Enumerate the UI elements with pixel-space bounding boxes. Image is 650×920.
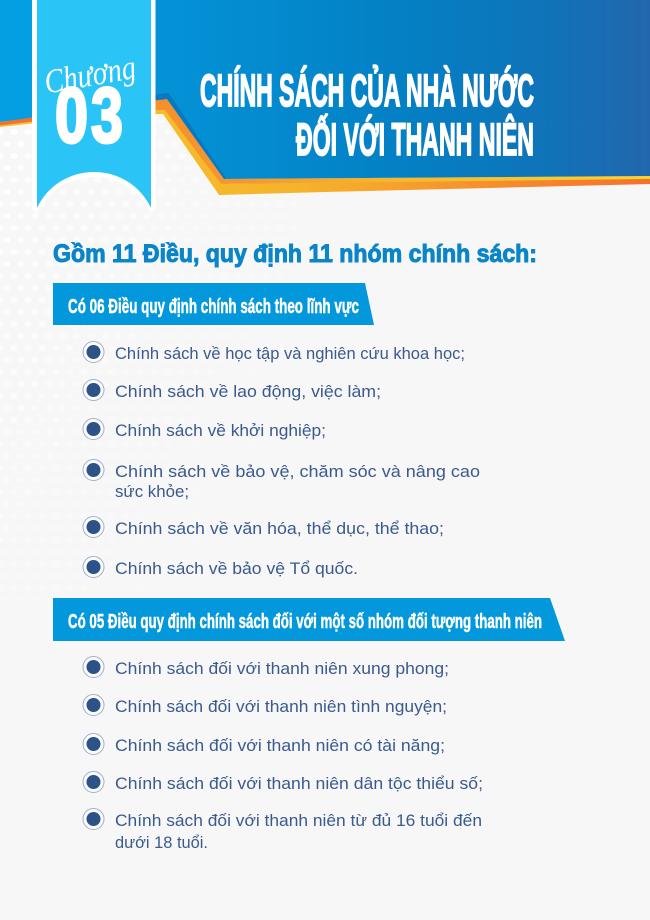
item 2: Chính sách về lao động, việc làm; bbox=[115, 383, 381, 401]
chapter number: 3 bbox=[91, 71, 123, 159]
item 4 bbox=[83, 460, 480, 501]
section banner: field policies bbox=[53, 283, 374, 325]
item 11: dưới 18 tuổi. bbox=[115, 834, 208, 852]
item 4: Chính sách về bảo vệ, chăm sóc và nâng cao bbox=[115, 463, 480, 481]
chapter ribbon bbox=[32, 0, 156, 213]
chapter number bbox=[55, 71, 123, 159]
item 1: Chính sách về học tập và nghiên cứu khoa học; bbox=[115, 345, 465, 363]
chapter word: Chương bbox=[42, 49, 139, 102]
list: field policies bbox=[83, 342, 480, 578]
item 11: Chính sách đối với thanh niên từ đủ 16 tuổi đến bbox=[115, 812, 482, 830]
item 3 bbox=[83, 418, 326, 440]
item 2 bbox=[83, 380, 381, 401]
item 6 bbox=[83, 556, 358, 578]
item 6: Chính sách về bảo vệ Tổ quốc. bbox=[115, 560, 358, 578]
item 3: Chính sách về khởi nghiệp; bbox=[115, 422, 326, 440]
list: youth groups bbox=[83, 656, 483, 852]
heading: Gồm 11 Điều, quy định 11 nhóm chính sách: bbox=[53, 240, 537, 268]
item 5: Chính sách về văn hóa, thể dục, thể thao; bbox=[115, 520, 444, 538]
chapter number: 0 bbox=[55, 71, 88, 159]
title bbox=[200, 65, 534, 165]
section banner: field policies: Có 06 Điều quy định chính sách theo lĩnh vực bbox=[68, 296, 359, 318]
section banner: youth groups bbox=[53, 598, 565, 641]
item 4: sức khỏe; bbox=[115, 483, 189, 501]
item 8: Chính sách đối với thanh niên tình nguyện; bbox=[115, 698, 447, 716]
header banner bbox=[0, 0, 650, 195]
item 10: Chính sách đối với thanh niên dân tộc thiểu số; bbox=[115, 775, 483, 793]
item 7: Chính sách đối với thanh niên xung phong; bbox=[115, 660, 449, 678]
item 11 bbox=[83, 808, 482, 852]
item 9: Chính sách đối với thanh niên có tài năng; bbox=[115, 737, 445, 755]
